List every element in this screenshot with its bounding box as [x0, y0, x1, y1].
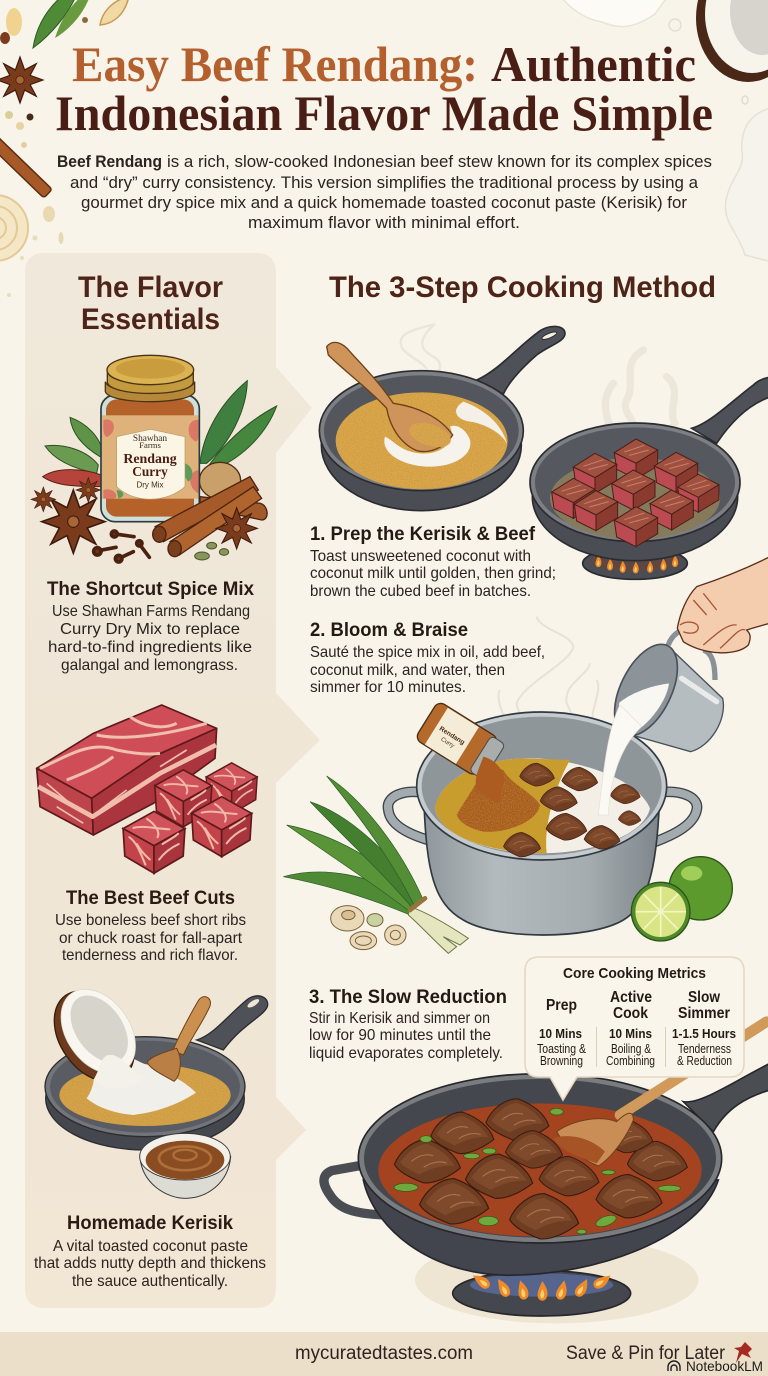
icon: toasted coconut — [336, 392, 508, 489]
step 1 text — [310, 523, 556, 600]
step 1 text: 1. Prep the Kerisik & Beef — [310, 523, 535, 545]
metric: slow simmer: Tenderness — [678, 1042, 731, 1056]
icon: white coconut mound — [87, 1048, 196, 1115]
icon: jar: Dry Mix — [136, 480, 164, 489]
title: Authentic — [491, 36, 696, 92]
text: the shortcut spice mix: Use Shawhan Farms Rendang — [52, 603, 250, 620]
icon: pan body — [319, 371, 523, 511]
intro paragraph: maximum flavor with minimal effort. — [248, 214, 520, 232]
icon: burner — [583, 547, 687, 579]
icon: wok handles — [324, 1063, 768, 1215]
step 2 text: coconut milk, and water, then — [310, 662, 505, 679]
metric: active cook: Active — [610, 989, 652, 1006]
icon: lemongrass — [283, 776, 468, 953]
text: homemade kerisik — [34, 1212, 266, 1290]
illustration: pot with spice, milk and aromatics — [283, 557, 768, 953]
icon: pan body — [530, 423, 740, 561]
text: the shortcut spice mix: The Shortcut Spice Mix — [47, 578, 254, 600]
icon: milk stream — [598, 705, 642, 815]
icon: cardamom — [195, 542, 229, 560]
illustration: pan of toasting coconut — [319, 324, 565, 511]
step 1 text: coconut milk until golden, then grind; — [310, 565, 556, 582]
metric: slow simmer: 1-1.5 Hours — [672, 1026, 736, 1041]
text: homemade kerisik: A vital toasted coconut paste — [53, 1238, 248, 1255]
icon: push pin — [734, 1342, 752, 1363]
intro paragraph — [57, 153, 712, 232]
text: the shortcut spice mix — [47, 578, 254, 674]
step 3 text: 3. The Slow Reduction — [309, 986, 507, 1008]
metric: active cook — [606, 989, 655, 1068]
icon: spice jar pouring: Rendang — [438, 725, 466, 746]
intro paragraph: Beef Rendang — [57, 153, 162, 171]
icon: pan — [45, 996, 268, 1150]
illustration: beef cuts — [37, 705, 257, 873]
text: the best beef cuts: Use boneless beef short ribs — [55, 912, 246, 929]
step 3 text: Stir in Kerisik and simmer on — [309, 1010, 490, 1027]
icon: steam — [401, 324, 440, 383]
watermark: notebooklm: NotebookLM — [686, 1358, 763, 1374]
step 3 text: liquid evaporates completely. — [309, 1045, 503, 1062]
text: the best beef cuts — [55, 887, 246, 964]
icon: wok body — [358, 1074, 722, 1275]
icon: cinnamon sticks — [153, 477, 267, 557]
decoration: top-left spices — [0, 0, 128, 297]
icon: nutmeg — [199, 462, 241, 499]
intro paragraph: and “dry” curry consistency. This version simplifies the traditional process by using a — [70, 174, 699, 192]
icon: jar — [101, 355, 199, 522]
icon: beef chunks — [503, 763, 641, 857]
heading: the flavor essentials: Essentials — [81, 303, 220, 336]
icon: steam — [498, 617, 598, 750]
icon: steam — [605, 350, 675, 452]
heading: the flavor essentials: The Flavor — [78, 271, 223, 304]
illustration: wok of rendang on burner — [324, 1022, 768, 1323]
text: the shortcut spice mix: hard-to-find ingredients like — [48, 639, 252, 656]
metric: prep — [537, 997, 587, 1068]
icon: leaves — [45, 381, 277, 473]
metric: prep: Prep — [546, 997, 577, 1014]
icon: hand — [677, 557, 768, 653]
metric: active cook: Boiling & — [611, 1042, 652, 1056]
step 2 text: Sauté the spice mix in oil, add beef, — [310, 644, 545, 661]
title: Easy Beef Rendang: — [72, 36, 478, 92]
text: homemade kerisik: the sauce authentically. — [72, 1273, 228, 1290]
footer: save and pin: Save & Pin for Later — [566, 1343, 726, 1364]
icon: wooden spoon — [553, 1022, 767, 1166]
title: Indonesian Flavor Made Simple — [55, 85, 713, 141]
step 2 text: simmer for 10 minutes. — [310, 679, 466, 696]
icon: chili pods — [43, 470, 102, 487]
metric: active cook: Combining — [606, 1054, 655, 1068]
icon: halved coconut — [38, 974, 154, 1097]
title — [55, 36, 713, 141]
icon: limes — [631, 857, 732, 941]
icon: pot handles — [388, 792, 697, 845]
icon: beef cubes — [552, 439, 719, 547]
metric: slow simmer: Slow — [688, 989, 720, 1006]
intro paragraph: gourmet dry spice mix and a quick homemade toasted coconut paste (Kerisik) for — [81, 194, 688, 212]
icon: wooden spoon — [327, 342, 453, 452]
heading: the flavor essentials — [78, 271, 223, 336]
panel: flavor essentials — [25, 253, 320, 1308]
text: the shortcut spice mix: Curry Dry Mix to replace — [60, 621, 240, 638]
decoration: top-right coconut and milk splash — [560, 0, 768, 262]
icon: green chili pieces — [394, 1108, 681, 1234]
heading: the 3-step cooking method: The 3-Step Cooking Method — [329, 271, 716, 304]
icon: jar: Shawhan — [133, 434, 167, 444]
metric: prep: Toasting & — [537, 1042, 587, 1056]
text: homemade kerisik: Homemade Kerisik — [67, 1212, 233, 1234]
icon: metal mug — [602, 628, 723, 752]
text: homemade kerisik: that adds nutty depth and thickens — [34, 1255, 266, 1272]
icon: jar: Curry — [132, 464, 168, 479]
icon: rendang sauce — [378, 1103, 702, 1237]
icon: handle — [692, 377, 768, 443]
intro paragraph: is a rich, slow-cooked Indonesian beef stew known for its complex spices — [167, 153, 712, 171]
step 1 text: Toast unsweetened coconut with — [310, 548, 531, 565]
icon: burner — [453, 1271, 631, 1316]
icon: coconut curry contents — [435, 758, 650, 853]
metric: active cook: Cook — [613, 1005, 648, 1022]
metric: slow simmer: Simmer — [678, 1005, 730, 1022]
icon: spice jar pouring — [415, 701, 506, 781]
metric: prep: 10 Mins — [539, 1026, 582, 1041]
icon: pot body — [417, 712, 667, 935]
icon: handle — [477, 326, 565, 394]
icon: star anise — [31, 478, 257, 553]
text: the shortcut spice mix: galangal and lemongrass. — [61, 657, 238, 674]
icon: jar: Farms — [139, 440, 161, 450]
step 1 text: brown the cubed beef in batches. — [310, 583, 531, 600]
metric: active cook: 10 Mins — [609, 1026, 652, 1041]
text: the best beef cuts: The Best Beef Cuts — [66, 887, 235, 909]
step 2 text — [310, 619, 545, 696]
metric: prep: Browning — [540, 1054, 583, 1068]
icon: spice jar pouring: Curry — [439, 737, 455, 750]
metric: slow simmer — [672, 989, 736, 1068]
step 2 text: 2. Bloom & Braise — [310, 619, 468, 641]
icon: beef slab — [37, 705, 217, 835]
footer bar — [0, 1332, 768, 1376]
icon: galangal slices — [331, 906, 406, 950]
icon: jar: Rendang — [123, 451, 177, 466]
callout: core cooking metrics: Core Cooking Metrics — [563, 965, 706, 982]
icon: beef cubes — [123, 763, 257, 873]
illustration: spice jar with spices — [31, 355, 277, 562]
icon: bowl of kerisik paste — [140, 1133, 231, 1198]
footer: website: mycuratedtastes.com — [295, 1343, 473, 1364]
callout: core cooking metrics — [525, 957, 744, 1100]
illustration: kerisik pan, coconut and bowl — [38, 974, 268, 1198]
icon: cloves — [94, 531, 149, 562]
step 3 text: low for 90 minutes until the — [309, 1027, 491, 1044]
icon: wooden spoon — [147, 997, 210, 1081]
icon: beef chunks — [394, 1099, 687, 1239]
text: the best beef cuts: or chuck roast for fall-apart — [59, 930, 243, 947]
shadow under wok — [415, 1237, 698, 1323]
step 3 text — [309, 986, 507, 1062]
metric: slow simmer: & Reduction — [677, 1054, 732, 1068]
text: the best beef cuts: tenderness and rich flavor. — [62, 947, 238, 964]
illustration: pan of browned beef on burner — [530, 350, 768, 579]
